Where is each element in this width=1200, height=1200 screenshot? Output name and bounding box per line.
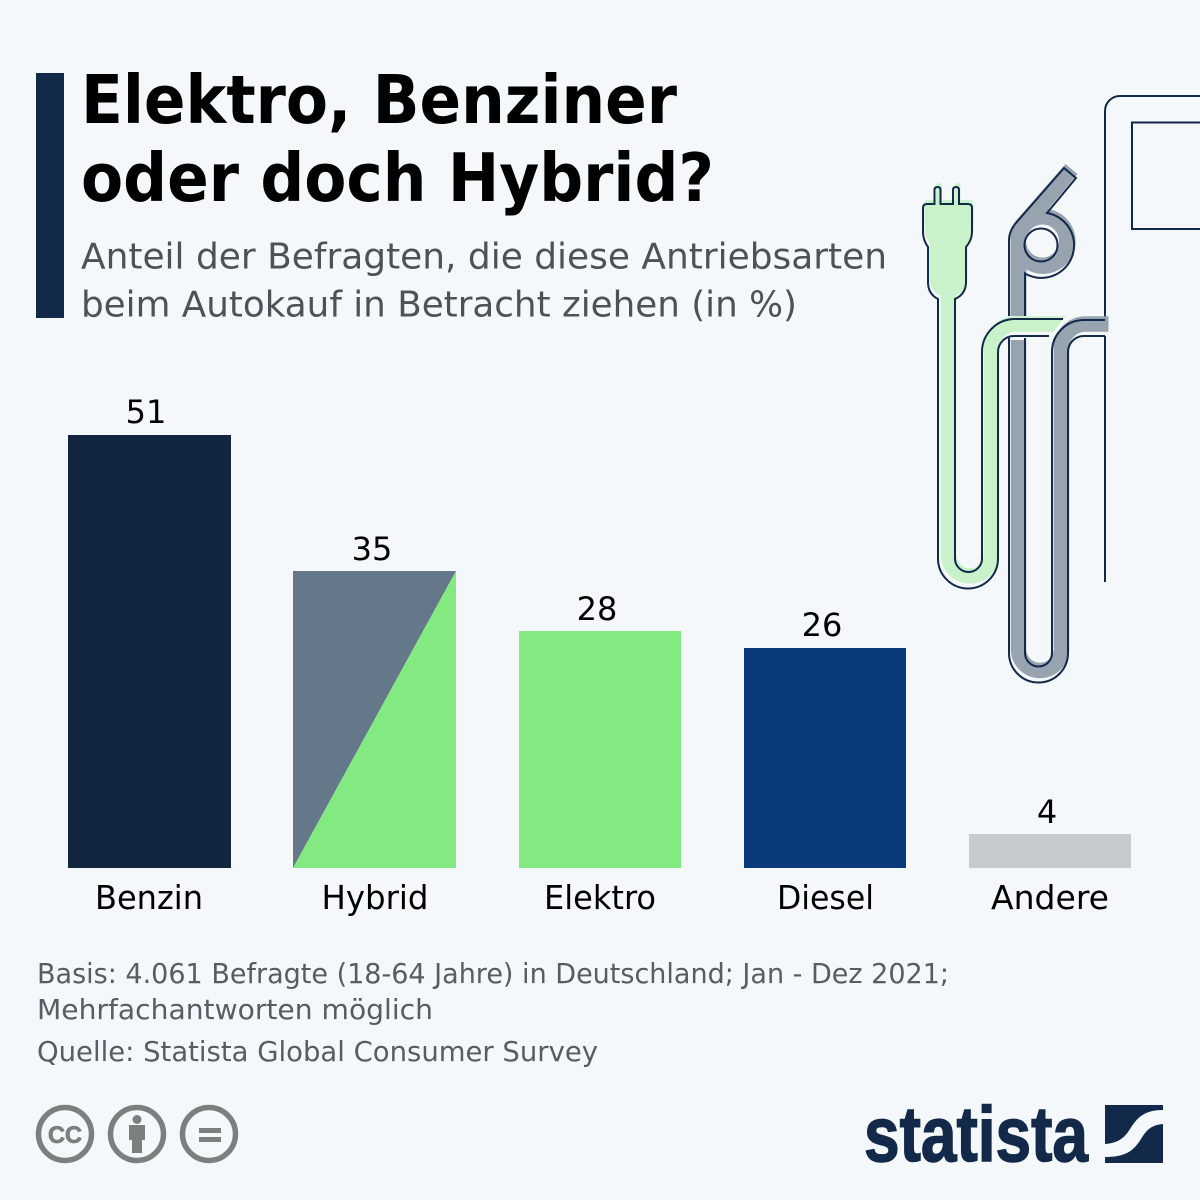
icon: attribution person	[110, 1108, 164, 1160]
electric cable and plug	[923, 183, 1066, 588]
subtitle: Anteil der Befragten, die diese Antriebsarten	[81, 236, 887, 278]
title	[81, 61, 714, 217]
footnote: basis and source	[37, 957, 949, 1068]
bar: Hybrid	[293, 530, 456, 917]
station outline	[1105, 96, 1200, 582]
bar: Benzin	[68, 393, 231, 917]
bar: Elektro: 28	[577, 590, 617, 628]
bar: Andere	[969, 793, 1131, 917]
icon: no derivatives equals	[182, 1108, 236, 1160]
logo wordmark: statista	[864, 1090, 1088, 1178]
bar: Andere: 4	[1037, 793, 1057, 831]
fuel hose and nozzle	[1009, 164, 1108, 682]
footnote: basis and source: Mehrfachantworten möglich	[37, 993, 433, 1026]
bar: Diesel: Diesel	[777, 878, 874, 917]
illustration: charging station and fuel pump cables	[923, 96, 1200, 682]
footnote: basis and source: Quelle: Statista Global Consumer Survey	[37, 1035, 598, 1068]
title: Elektro, Benziner	[81, 61, 677, 139]
bar: Benzin: Benzin	[95, 878, 203, 917]
bar: Diesel	[744, 606, 906, 917]
bar: Hybrid: Hybrid	[322, 878, 428, 917]
icon: CC: CC	[48, 1122, 82, 1149]
subtitle: beim Autokauf in Betracht ziehen (in %)	[81, 284, 797, 326]
title accent bar	[36, 73, 64, 318]
subtitle	[81, 236, 887, 326]
statista logo	[864, 1090, 1163, 1178]
icon: CC	[38, 1108, 92, 1160]
bar: Hybrid: 35	[352, 530, 392, 568]
bar: Elektro: Elektro	[544, 878, 656, 917]
bar: Benzin: 51	[126, 393, 166, 431]
footnote: basis and source: Basis: 4.061 Befragte (18-64 Jahre) in Deutschland; Jan - Dez 2021;	[37, 957, 949, 990]
logo mark	[1105, 1105, 1163, 1163]
bar: Andere: Andere	[991, 878, 1109, 917]
title: oder doch Hybrid?	[81, 139, 714, 217]
bar: Elektro	[519, 590, 681, 917]
icons: creative commons licence	[38, 1108, 236, 1160]
bar: Diesel: 26	[802, 606, 842, 644]
bar chart	[68, 393, 1131, 917]
